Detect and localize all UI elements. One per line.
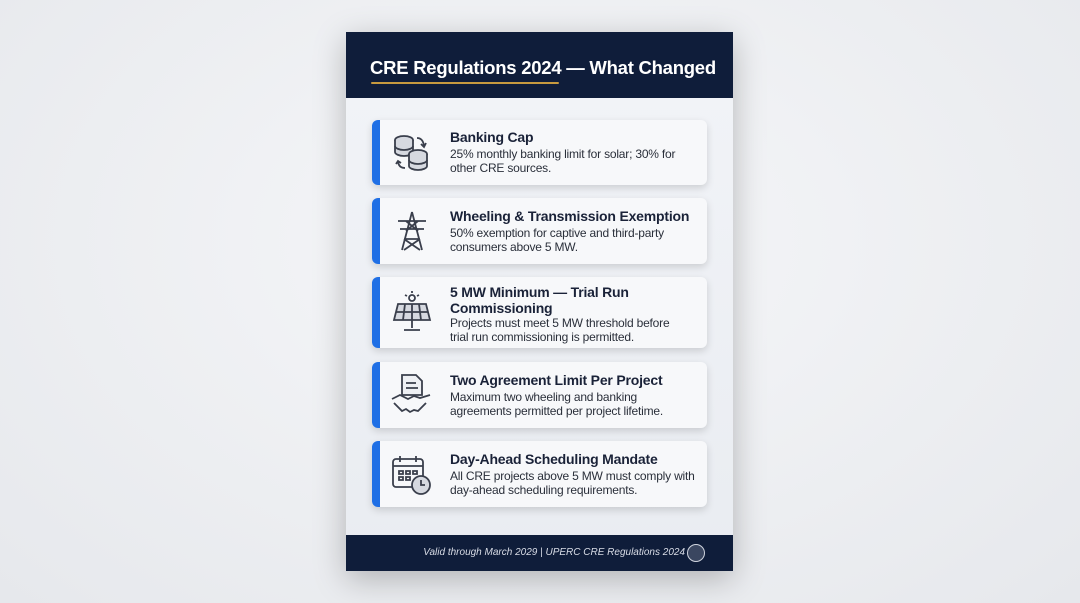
- card: day-ahead: [372, 441, 707, 507]
- card title: 5 MW Minimum — Trial Run Commissioning: [450, 284, 629, 316]
- icon: handshake: [392, 374, 430, 413]
- card: wheeling: [372, 198, 707, 264]
- icon: pylon: [398, 212, 426, 251]
- card: banking cap: [372, 120, 707, 185]
- card text: Projects must meet 5 MW threshold before trial run commissioning is permitted.: [450, 316, 669, 344]
- card text: 50% exemption for captive and third-party consumers above 5 MW.: [450, 226, 664, 254]
- panel: infographic page: [346, 32, 733, 571]
- header: [346, 32, 733, 98]
- card title: Wheeling & Transmission Exemption: [450, 208, 689, 224]
- card: 5 MW minimum: [372, 277, 707, 348]
- card: two agreement: [372, 362, 707, 428]
- footer: [346, 535, 733, 571]
- card title: Two Agreement Limit Per Project: [450, 372, 662, 388]
- title: CRE Regulations 2024 — What Changed: [370, 57, 716, 78]
- icon: seal: [687, 544, 705, 562]
- card text: All CRE projects above 5 MW must comply with day-ahead scheduling requirements.: [450, 469, 695, 497]
- footer text: Valid through March 2029 | UPERC CRE Regulations 2024: [423, 547, 685, 558]
- card text: Maximum two wheeling and banking agreements permitted per project lifetime.: [450, 390, 663, 418]
- icon: coins: [394, 135, 428, 171]
- card title: Banking Cap: [450, 129, 533, 145]
- icon: solar panel: [392, 291, 432, 331]
- card text: 25% monthly banking limit for solar; 30% for other CRE sources.: [450, 147, 675, 175]
- icon: calendar clock: [392, 456, 431, 495]
- card title: Day-Ahead Scheduling Mandate: [450, 451, 658, 467]
